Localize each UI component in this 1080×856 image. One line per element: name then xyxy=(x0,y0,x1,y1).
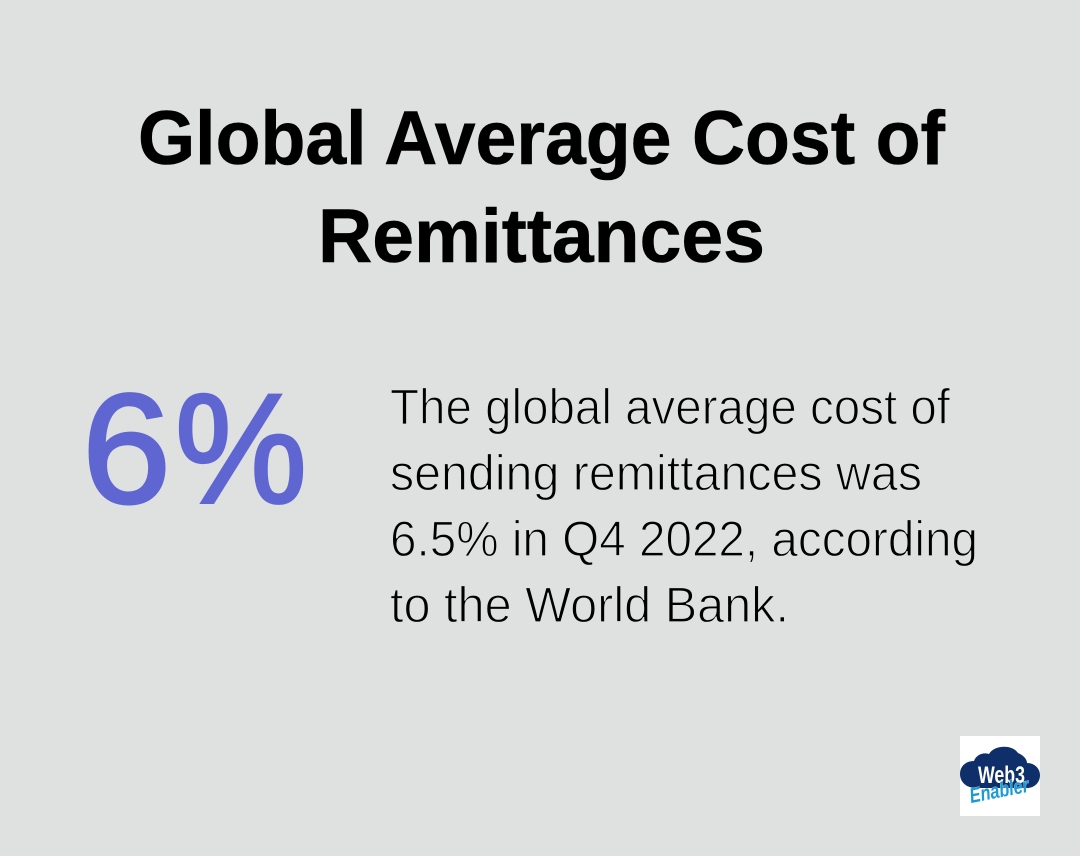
description text: to the World Bank. xyxy=(390,577,789,633)
title: Remittances xyxy=(318,194,765,279)
title xyxy=(138,96,946,279)
logo wordmark: Web3: Web3 xyxy=(978,762,1025,789)
logo wordmark: Enabler: Enabler xyxy=(968,774,1032,808)
description text: sending remittances was xyxy=(390,445,922,501)
description text xyxy=(390,379,978,633)
big statistic: 6%: % xyxy=(175,362,307,536)
big statistic: 6% xyxy=(82,362,307,536)
icon: cloud xyxy=(960,747,1040,788)
logo: Web3 Enabler xyxy=(960,736,1040,816)
description text: The global average cost of xyxy=(390,379,950,435)
description text: 6.5% in Q4 2022, according xyxy=(390,511,978,567)
title: Global Average Cost of xyxy=(138,96,946,181)
big statistic: 6%: 6 xyxy=(82,362,171,536)
